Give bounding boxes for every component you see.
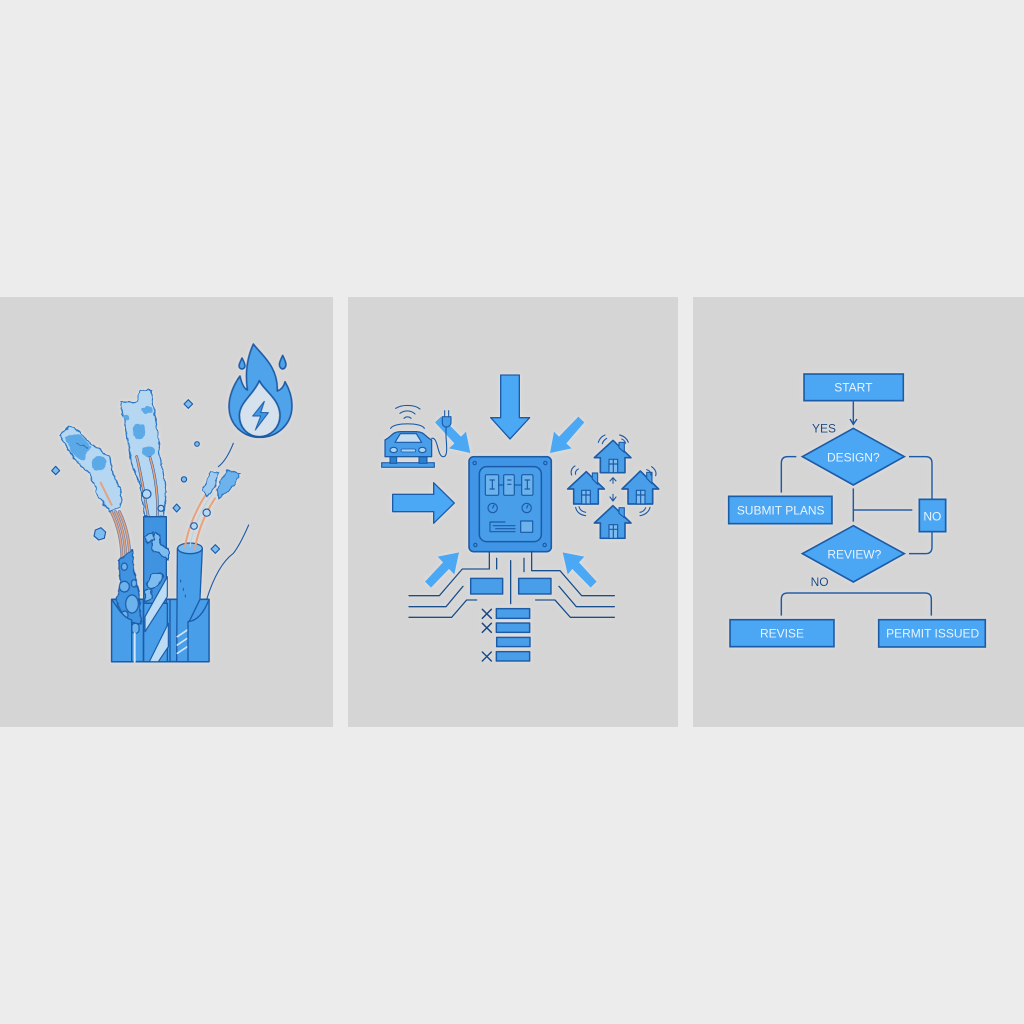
label: no: NO [811,575,829,589]
box: revise: REVISE [760,627,804,641]
icon: right split cable [177,443,249,662]
icon: cable bundle box back [112,599,209,662]
start box: START [834,381,873,395]
label: yes: YES [812,421,836,435]
icon: left burnt cable [60,427,142,633]
icon: middle burnt cable [120,390,169,662]
box: no: NO [923,510,941,524]
panel: damaged cables [0,297,333,727]
panel: electrical load panel [348,297,678,727]
icon: flame with lightning bolt [229,344,292,437]
icon: electric car charging [382,405,451,467]
box: submit plans [729,496,832,524]
decision: review: REVIEW? [827,548,882,562]
box: submit plans: SUBMIT PLANS [737,504,825,518]
decision: design: DESIGN? [827,451,880,465]
breaker boxes [471,578,551,661]
flowchart connectors [781,402,932,616]
box: permit issued: PERMIT ISSUED [886,627,980,641]
arrows pointing to panel [393,375,597,588]
x marks [482,609,491,661]
box: revise [730,620,834,647]
icon: debris sparks [52,400,220,553]
decision: design [802,428,904,485]
icon: main electrical panel [469,457,551,552]
wiring lines [409,552,614,617]
icon: cable box front flaps [112,599,209,662]
decision: review [802,526,904,582]
panel: permit flowchart [693,297,1024,727]
icon: four houses [568,435,659,538]
box: no [919,499,946,532]
start box [804,374,903,401]
box: permit issued [879,620,985,647]
